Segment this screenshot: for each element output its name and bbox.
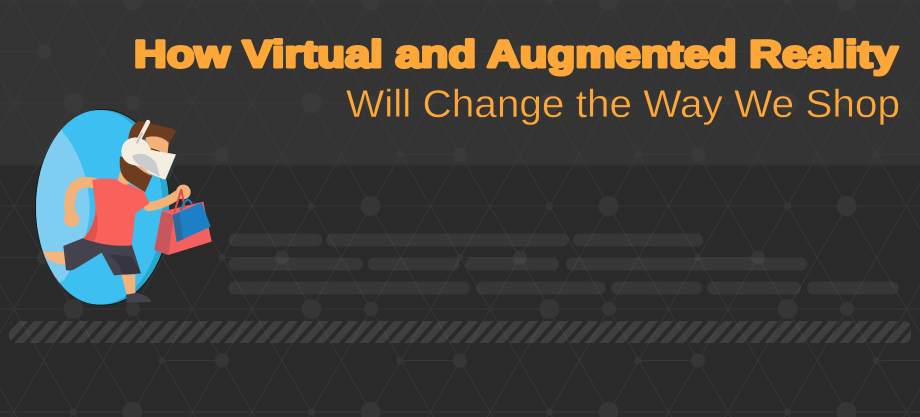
illustration: man with VR headset stepping through portal: [35, 109, 212, 306]
shopping bags: [154, 189, 212, 255]
shirt: [83, 178, 149, 246]
placeholder text lines: [228, 234, 898, 294]
portal: [35, 109, 170, 306]
heading: subtitle: Will Change the Way We Shop: [346, 83, 900, 126]
title: [134, 34, 900, 126]
front leg: [121, 275, 135, 295]
heading: main title: How Virtual and Augmented Reality: [134, 34, 898, 76]
back arm: [64, 182, 95, 227]
background: lower band with network pattern: [0, 164, 920, 417]
background: upper band with network pattern: [0, 0, 920, 166]
head: beard and hair: [120, 121, 176, 192]
striped progress bar: [9, 321, 911, 343]
back leg: [43, 252, 66, 265]
VR headset: [121, 122, 179, 180]
shorts: [63, 237, 141, 275]
neck: [118, 172, 132, 185]
shoe: [126, 293, 151, 303]
front arm: [148, 185, 191, 207]
